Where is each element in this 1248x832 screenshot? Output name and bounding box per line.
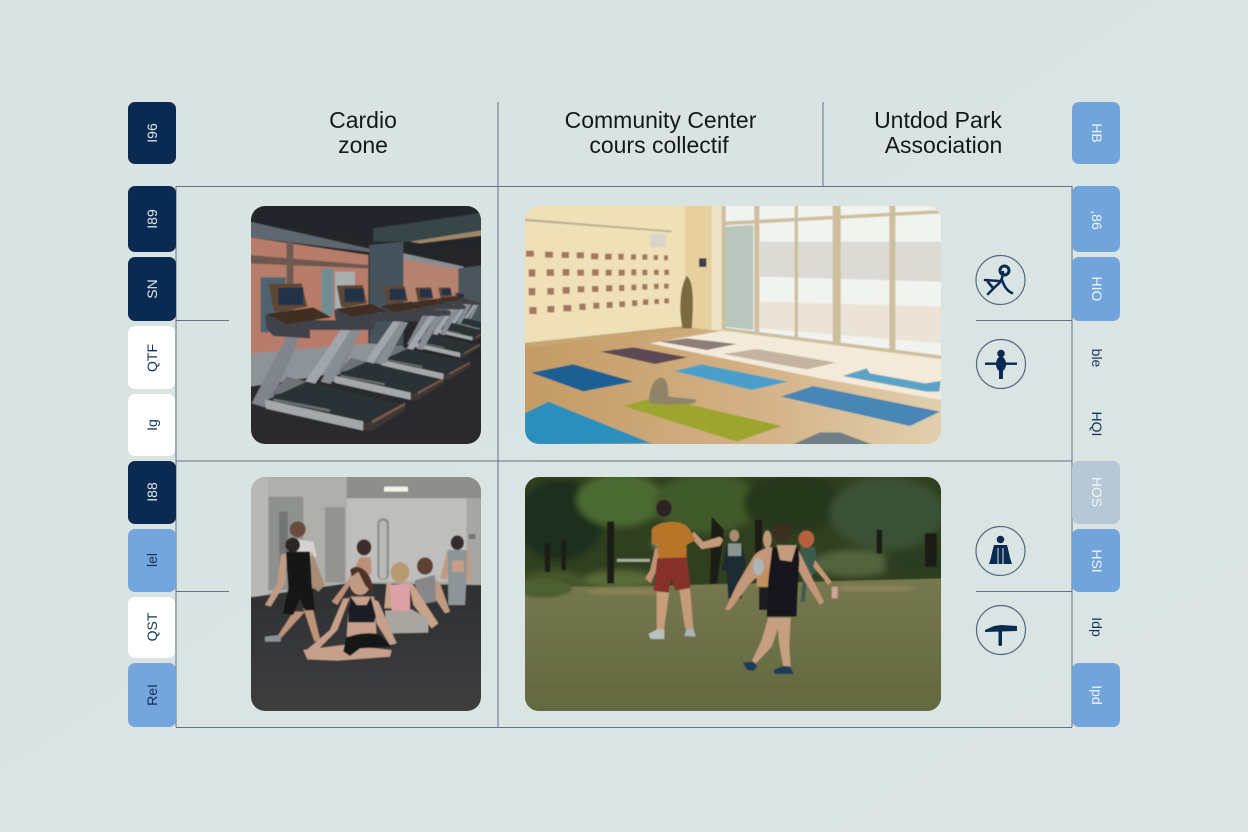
tab: lel xyxy=(144,553,160,567)
icon: standing figure xyxy=(976,526,1025,576)
heading: Cardio zone: zone xyxy=(338,132,388,158)
column headings xyxy=(329,107,1002,158)
tab: HOS xyxy=(1089,477,1105,507)
heading: Cardio zone: Cardio xyxy=(329,107,397,133)
tab xyxy=(128,663,176,727)
icon: person seated on bench xyxy=(976,256,1025,304)
tab xyxy=(1072,461,1120,524)
heading: Community Center: Community Center xyxy=(565,107,757,133)
photo: treadmills xyxy=(251,206,481,444)
front seated woman xyxy=(303,645,392,661)
background people xyxy=(722,543,746,598)
icon: person arms out xyxy=(976,340,1026,388)
tab: HIO xyxy=(1089,277,1105,302)
tab xyxy=(1072,663,1120,727)
woman behind xyxy=(332,557,372,605)
tab xyxy=(128,326,175,389)
heading: Community Center: cours collectif xyxy=(589,132,729,158)
tab: Ig xyxy=(144,419,160,431)
right tab column xyxy=(1072,102,1120,727)
tab: I88 xyxy=(144,482,160,502)
tab xyxy=(128,102,176,164)
tab xyxy=(1072,186,1120,252)
tab xyxy=(128,186,176,252)
table grid lines xyxy=(176,102,1072,728)
tab: Ipd xyxy=(1089,685,1105,705)
tab: QST xyxy=(144,612,160,641)
tab: I89 xyxy=(144,209,160,229)
tab xyxy=(128,597,175,658)
heading: Park Association: Untdod Park xyxy=(874,107,1002,133)
tab: SN xyxy=(144,279,160,299)
icon: T-shaped figure xyxy=(976,606,1026,654)
photo: yoga studio with mats xyxy=(520,200,947,453)
photo: outdoor group in park xyxy=(525,477,941,711)
man in orange shirt xyxy=(645,548,661,583)
woman in pink xyxy=(384,582,392,608)
tab: ReI xyxy=(144,684,160,706)
tab: QTF xyxy=(144,344,160,372)
tab xyxy=(1072,257,1120,321)
tab: ,86 xyxy=(1089,210,1105,230)
tab: HB xyxy=(1089,123,1105,143)
far right woman xyxy=(440,550,448,580)
tab xyxy=(128,529,176,592)
tab: I96 xyxy=(144,123,160,143)
tab label: Idp xyxy=(1089,617,1105,637)
tab xyxy=(128,394,175,456)
man with bag xyxy=(296,538,317,557)
tab label: ble xyxy=(1089,349,1105,368)
tab: HSI xyxy=(1089,549,1105,573)
woman in grey tank xyxy=(433,577,450,613)
tab xyxy=(1072,102,1120,164)
tab xyxy=(1072,529,1120,592)
heading: Park Association: Association xyxy=(885,132,1002,158)
photo: group class in studio xyxy=(251,477,481,711)
standing woman xyxy=(265,553,287,607)
tab label: HQI xyxy=(1089,412,1105,436)
tab xyxy=(128,257,176,321)
left tab column xyxy=(128,102,176,727)
woman in black dress xyxy=(725,547,777,610)
tab xyxy=(128,461,176,524)
